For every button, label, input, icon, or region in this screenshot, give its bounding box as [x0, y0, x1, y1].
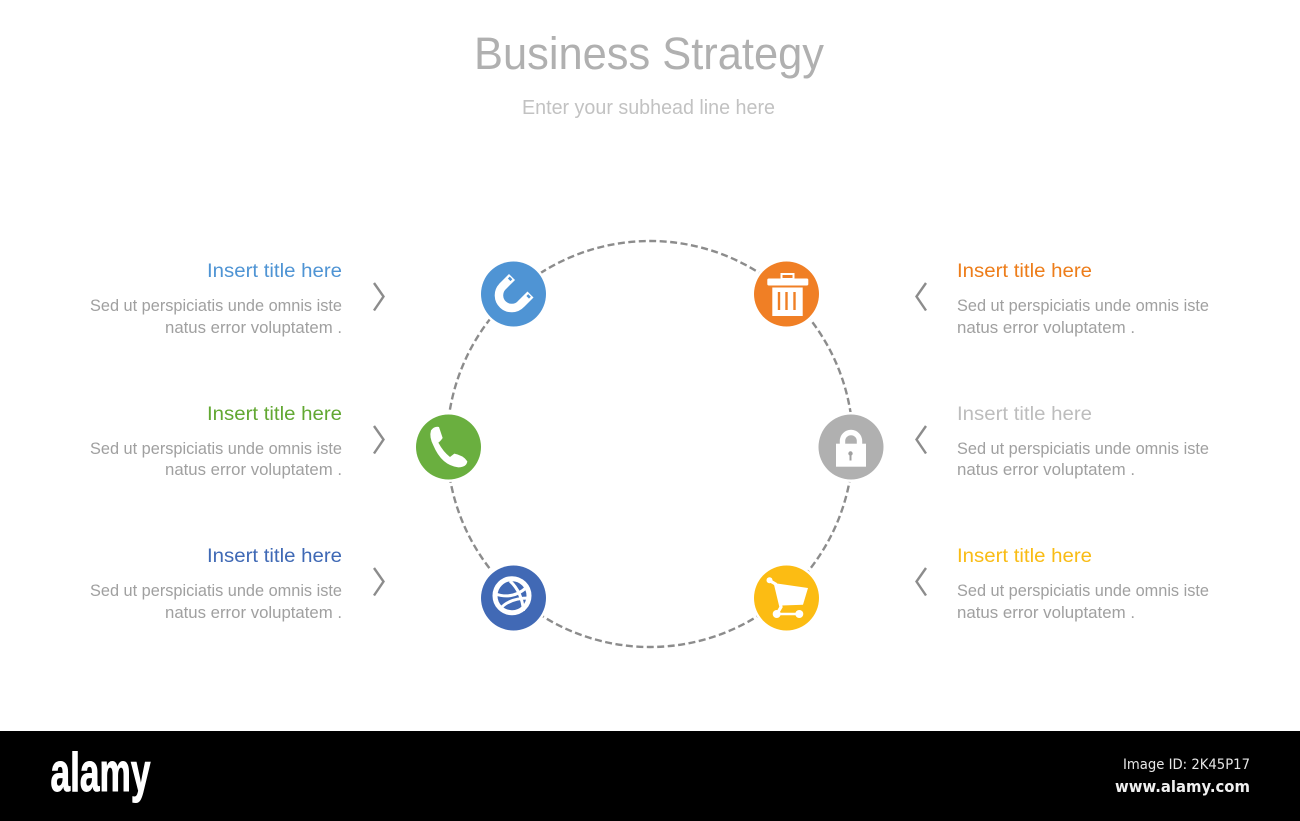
title: yellow: Insert title here — [957, 545, 1092, 567]
body text: left 3: natus error voluptatem . — [165, 604, 342, 622]
icon: shopping cart — [752, 563, 822, 633]
body text: right 3: Sed ut perspiciatis unde omnis iste — [957, 582, 1209, 600]
title: blue: Insert title here — [207, 260, 342, 282]
body text: right 3 — [957, 582, 1209, 622]
right item 2: lock — [916, 403, 1209, 479]
dashed ring — [447, 241, 853, 647]
left item 3: basketball — [90, 545, 384, 622]
logo: alamy: alamy — [50, 741, 151, 803]
body text: left 2: Sed ut perspiciatis unde omnis iste — [90, 440, 342, 458]
body text: right 1: Sed ut perspiciatis unde omnis iste — [957, 297, 1209, 315]
chevron: right 2 — [916, 426, 926, 454]
icon: trash can — [752, 259, 822, 329]
chevron: right 3 — [916, 568, 926, 596]
body text: right 1 — [957, 297, 1209, 337]
body text: left 2 — [90, 440, 342, 479]
icon: magnet — [478, 259, 548, 329]
body text: left 3 — [90, 582, 342, 622]
body text: right 2: natus error voluptatem . — [957, 461, 1135, 479]
body text: right 3: natus error voluptatem . — [957, 604, 1135, 622]
body text: left 2: natus error voluptatem . — [165, 461, 342, 479]
body text: right 1: natus error voluptatem . — [957, 319, 1135, 337]
left item 2: phone — [90, 403, 384, 479]
chevron: right 1 — [916, 283, 926, 310]
image id: Image ID: 2K45P17 — [1123, 757, 1250, 773]
body text: left 3: Sed ut perspiciatis unde omnis iste — [90, 582, 342, 600]
icon: padlock — [816, 412, 886, 482]
title: orange: Insert title here — [957, 260, 1092, 282]
chevron: left 1 — [374, 283, 384, 310]
title: grey: Insert title here — [957, 403, 1092, 425]
site url: www.alamy.com — [1115, 777, 1250, 796]
body text: right 2 — [957, 440, 1209, 479]
body text: left 1 — [90, 297, 342, 337]
title: green: Insert title here — [207, 403, 342, 425]
icon: basketball — [478, 563, 548, 633]
footer bar — [0, 731, 1300, 821]
title: navy: Insert title here — [207, 545, 342, 567]
chevron: left 3 — [374, 568, 384, 596]
right item 1: trash — [916, 260, 1209, 337]
body text: left 1: natus error voluptatem . — [165, 319, 342, 337]
body text: left 1: Sed ut perspiciatis unde omnis iste — [90, 297, 342, 315]
icon: phone — [414, 412, 484, 482]
subhead: Enter your subhead line here — [522, 97, 775, 119]
chevron: left 2 — [374, 426, 384, 454]
title: Business Strategy — [474, 28, 824, 79]
right item 3: cart — [916, 545, 1209, 622]
body text: right 2: Sed ut perspiciatis unde omnis iste — [957, 440, 1209, 458]
left item 1: magnet — [90, 260, 384, 337]
